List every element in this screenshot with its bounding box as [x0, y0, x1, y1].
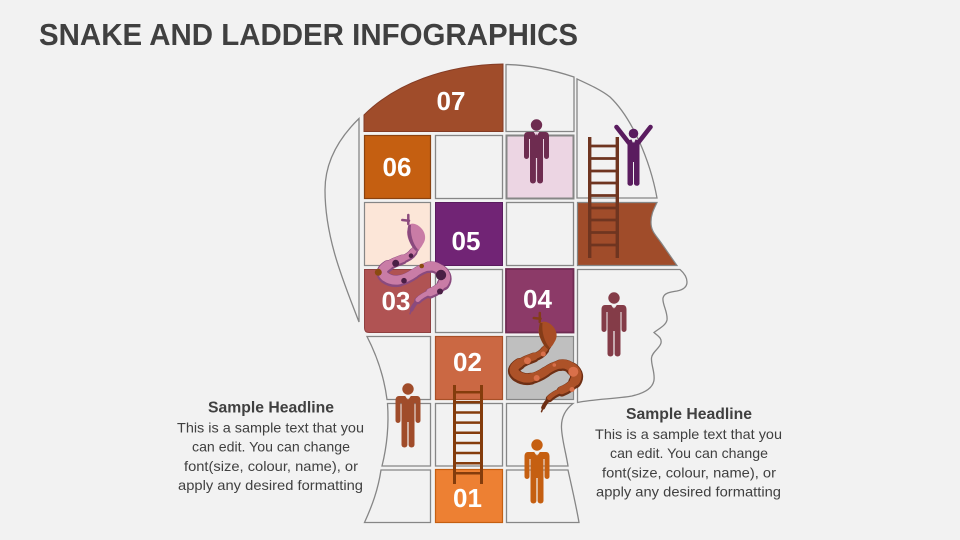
cell: bottom right	[506, 470, 579, 522]
cell: blank row 4 column 2	[436, 270, 502, 332]
cell 06: 06	[383, 152, 411, 182]
text block: left: can edit. You can change	[192, 439, 350, 455]
cell 07: 07	[437, 86, 465, 116]
text block: right: This is a sample text that you	[595, 426, 782, 442]
snake body highlight	[514, 344, 577, 398]
cell: blank row 2 column 2	[436, 136, 502, 198]
text block: right: font(size, colour, name), or	[602, 464, 776, 480]
text block: right: apply any desired formatting	[596, 483, 781, 499]
cell 02: 02	[453, 347, 482, 377]
snake tongue	[534, 313, 540, 322]
cell: top of head column 3	[506, 64, 574, 132]
snake body shadow	[382, 247, 445, 314]
cell: row 6 column 1	[382, 404, 430, 466]
cell: blank row 6 column 2	[436, 404, 502, 466]
cell 04	[506, 269, 574, 332]
snake: brown	[514, 313, 578, 412]
cell: bottom left	[364, 470, 430, 522]
cell 02	[436, 336, 502, 400]
ladder: lower centre	[454, 385, 482, 484]
person: face cell	[602, 292, 626, 356]
person: left lower cell	[396, 383, 420, 447]
cell 03	[364, 270, 430, 332]
cell: top of head column 4	[577, 79, 657, 198]
snake tongue	[402, 215, 409, 224]
snake head	[538, 322, 557, 349]
cell: neck	[506, 404, 573, 466]
person: pink cell	[524, 119, 549, 183]
text block: left: font(size, colour, name), or	[184, 458, 358, 474]
text block: left: This is a sample text that you	[177, 420, 364, 436]
ladder: upper right	[590, 137, 617, 258]
title: SNAKE AND LADDER INFOGRAPHICS	[39, 18, 578, 52]
cell 01: 01	[453, 483, 482, 513]
snake head	[407, 224, 425, 251]
snake body highlight	[382, 246, 445, 300]
cell: row 5 column 1	[367, 336, 430, 400]
cell 05	[436, 202, 502, 266]
snake spots	[524, 352, 578, 392]
cell 01	[436, 470, 502, 522]
cell 04: 04	[523, 284, 552, 314]
text block: right: Sample Headline	[626, 406, 752, 423]
head-shaped game board	[325, 64, 687, 522]
cell: blank row 3 column 3	[506, 202, 574, 266]
cell 03: 03	[382, 286, 410, 316]
text block: right	[595, 406, 782, 499]
cell: pink	[506, 136, 574, 198]
cell: gray	[506, 336, 574, 400]
snake spots	[375, 253, 446, 294]
snake body shadow	[514, 345, 577, 412]
snake: pink	[375, 215, 446, 314]
text block: left: Sample Headline	[208, 400, 334, 417]
person: arms raised	[616, 127, 650, 186]
cell 07	[364, 64, 503, 132]
cell 05: 05	[452, 226, 480, 256]
text block: left: apply any desired formatting	[178, 477, 363, 493]
text block: right: can edit. You can change	[610, 445, 768, 461]
cell: left back of head	[325, 118, 359, 322]
person: bottom orange	[524, 439, 550, 503]
cell 06	[364, 136, 430, 198]
cell: pale peach	[364, 202, 430, 266]
cell: face profile	[578, 270, 687, 402]
text block: left	[177, 400, 364, 493]
cell: brown face	[578, 202, 677, 266]
